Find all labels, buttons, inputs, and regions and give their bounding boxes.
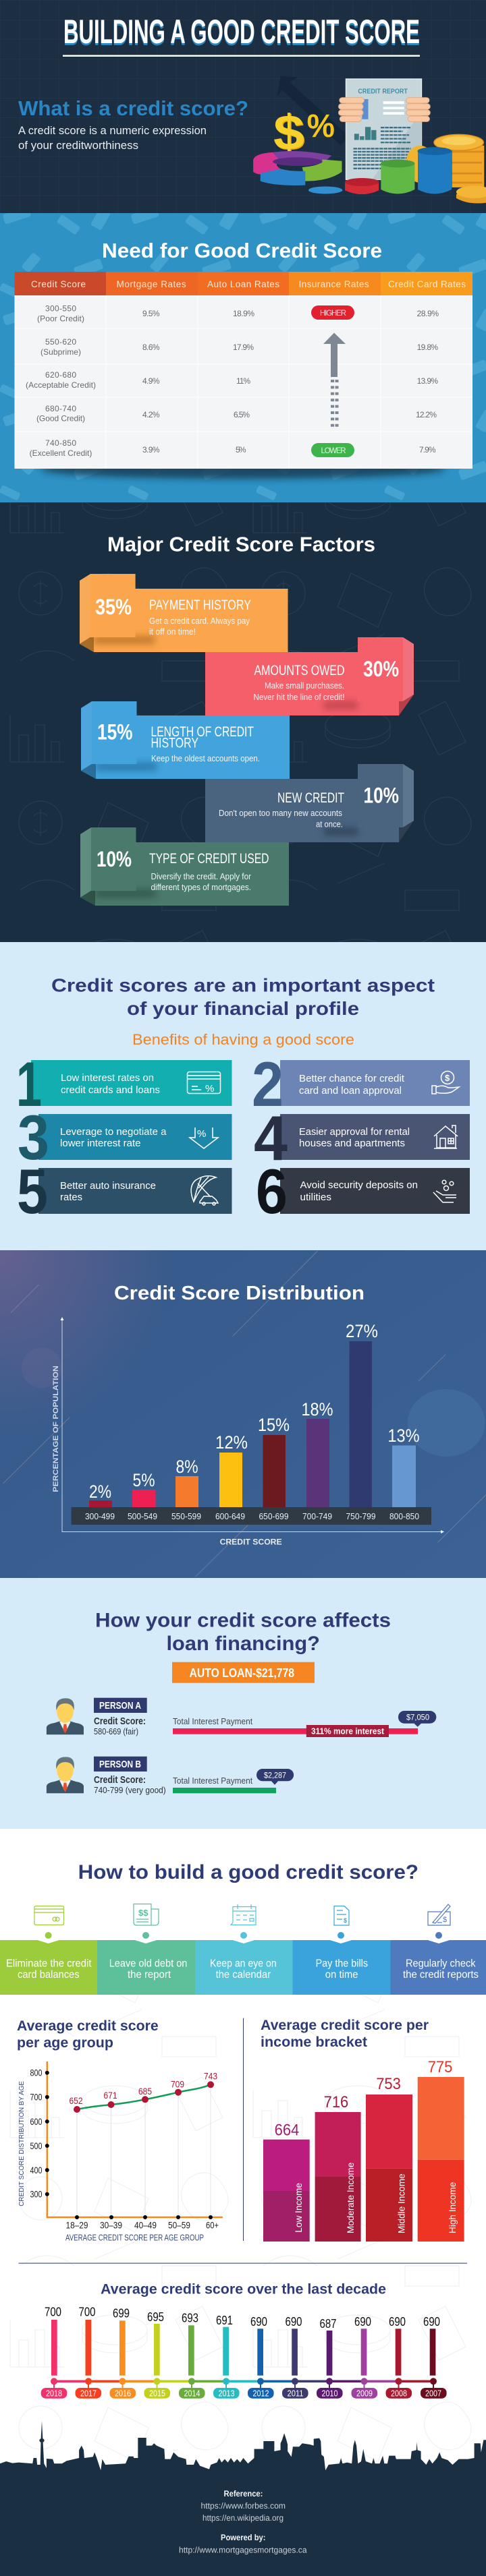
table header: Mortgage Rates [117, 279, 186, 289]
table rows: 550-620 [45, 337, 76, 347]
table header: Insurance Rates [299, 279, 369, 289]
footer: city skyline [0, 2421, 486, 2576]
card 4: rental approval: 4 [254, 1103, 288, 1173]
icon: cheque and pen [428, 1904, 450, 1925]
person B details: 740-799 (very good) [94, 1786, 166, 1795]
icon: calendar [231, 1904, 256, 1925]
text block: definition: of your creditworthiness [18, 140, 138, 152]
heading: Need for Good Credit Score [102, 239, 382, 262]
text block: definition [18, 125, 207, 152]
card 6: avoid deposits: Avoid security deposits on [300, 1180, 418, 1191]
credit report page: CREDIT REPORT [358, 88, 408, 96]
y axis label: PERCENTAGE OF POPULATION [52, 1366, 60, 1492]
badge: lower [311, 443, 354, 457]
heading: per income bracket: income bracket [261, 2035, 367, 2050]
table rows: (Excellent Credit) [30, 448, 92, 458]
timeline chart: last decade: 700 [78, 2306, 96, 2319]
step band: Keep an eye on [210, 1958, 277, 1970]
text block: definition: A credit score is a numeric expression [18, 125, 207, 137]
line chart: score by age: 400 [30, 2165, 43, 2175]
heading [95, 1610, 391, 1655]
ribbon: length of credit history [81, 701, 290, 779]
card 4: rental approval: houses and apartments [299, 1138, 405, 1149]
step band: Leave old debt on [109, 1958, 187, 1970]
heading: what is a credit score: What is a credit score? [18, 96, 248, 120]
y axis title: CREDIT SCORE DISTRIBUTION BY AGE [18, 2081, 26, 2206]
x axis label: CREDIT SCORE [220, 1538, 282, 1547]
references: https://www.forbes.com [201, 2501, 286, 2511]
table rows: (Acceptable Credit) [26, 380, 96, 390]
bar: person B interest [173, 1769, 294, 1793]
panel: credit score distribution [0, 1250, 486, 1578]
bar: person A interest: 311% more interest [311, 1727, 385, 1736]
line chart: score by age: 300 [30, 2189, 43, 2200]
ribbon: amounts owed: 30% [363, 657, 399, 681]
card 3: lower rate: lower interest rate [60, 1138, 140, 1149]
symbols: $ [274, 105, 305, 161]
person A details: PERSON A [99, 1700, 141, 1711]
icon: document [334, 1906, 349, 1925]
timeline chart: last decade: 687 [320, 2317, 336, 2331]
timeline chart: last decade: 690 [285, 2315, 302, 2329]
timeline chart: last decade: 690 [423, 2315, 440, 2329]
bar chart: score by income: High Income [448, 2182, 458, 2233]
card 6: avoid deposits [256, 1156, 470, 1227]
ribbon: type of credit used: TYPE OF CREDIT USED [149, 851, 269, 867]
auto loan banner [172, 1662, 315, 1683]
table rows: 8.6% [142, 343, 160, 352]
timeline chart: last decade: 2014 [184, 2388, 200, 2398]
card 1: low interest [16, 1049, 232, 1119]
timeline chart: last decade: 2016 [115, 2388, 131, 2398]
timeline chart: last decade: 2018 [46, 2388, 62, 2398]
bar: person B interest: $2,287 [264, 1771, 286, 1780]
references: http://www.mortgagesmortgages.ca [179, 2546, 307, 2555]
ribbon: type of credit used: Diversify the credit. Apply for [151, 872, 251, 881]
heading: of your financial profile [127, 998, 359, 1019]
badge: lower: LOWER [321, 447, 346, 455]
gold coin stacks [406, 134, 486, 204]
bar chart: distribution [52, 1317, 444, 1547]
timeline chart: last decade: 2008 [391, 2388, 407, 2398]
card 3: lower rate: Leverage to negotiate a [60, 1127, 167, 1138]
bar chart: distribution: 500-549 [128, 1511, 157, 1521]
table header: Auto Loan Rates [207, 279, 279, 289]
timeline chart: last decade: 2015 [149, 2388, 165, 2398]
person B details: Total Interest Payment [173, 1776, 252, 1786]
line chart: score by age [18, 2061, 223, 2243]
bar chart: distribution: 27% [346, 1321, 378, 1341]
step band: the report [128, 1969, 171, 1981]
ribbon: amounts owed: Never hit the line of credit! [254, 693, 344, 702]
card 5: auto insurance: rates [60, 1192, 82, 1203]
line chart: score by age: 671 [104, 2090, 117, 2101]
icon: house [434, 1125, 458, 1148]
line chart: score by age: 60+ [206, 2220, 219, 2231]
heading: per income bracket: Average credit score per [261, 2018, 429, 2033]
icon: card with percent [188, 1072, 220, 1094]
table rows: 18.9% [233, 309, 254, 318]
line chart: score by age: 40–49 [134, 2220, 157, 2231]
symbols: $ [273, 104, 304, 160]
badge: higher: HIGHER [320, 310, 346, 318]
line chart: score by age: 600 [30, 2116, 43, 2127]
person A details: Total Interest Payment [173, 1717, 252, 1726]
x axis title: AVERAGE CREDIT SCORE PER AGE GROUP [65, 2233, 204, 2243]
bar chart: score by income [263, 2058, 464, 2242]
ribbon: length of credit history: LENGTH OF CREDIT [151, 724, 254, 740]
bar chart: distribution: 600-649 [215, 1511, 245, 1521]
ribbon: payment history: 35% [95, 595, 132, 619]
step band: the credit reports [403, 1969, 479, 1981]
bar chart: distribution: 550-599 [171, 1511, 201, 1521]
bar chart: score by income: Middle Income [397, 2173, 407, 2233]
card 2: credit approval: 2 [252, 1049, 284, 1119]
ribbon: new credit [205, 764, 414, 842]
donut chart [253, 151, 342, 185]
timeline chart: last decade: 2017 [80, 2388, 97, 2398]
table rows: 4.2% [142, 410, 160, 419]
card 6: avoid deposits: 6 [256, 1156, 288, 1227]
table rows: (Subprime) [40, 347, 81, 357]
ribbon: type of credit used: different types of mortgages. [151, 883, 251, 892]
arrow: rates rise [323, 333, 346, 427]
ribbon: amounts owed: Make small purchases. [265, 681, 344, 691]
references: Powered by: [221, 2533, 266, 2542]
timeline chart: last decade: 699 [113, 2307, 130, 2320]
timeline chart: last decade: 2007 [425, 2388, 441, 2398]
bar: person A interest [173, 1711, 436, 1737]
bar chart: distribution: 5% [132, 1470, 155, 1490]
line chart: score by age: 800 [30, 2068, 43, 2078]
heading: loan financing? [166, 1633, 320, 1655]
icon: cheque and pen: $ [443, 1916, 447, 1924]
bar chart: score by income: 664 [275, 2121, 299, 2140]
bar chart: score by income: 753 [376, 2075, 401, 2093]
bar chart: distribution: 13% [387, 1426, 420, 1446]
card 4: rental approval [254, 1103, 470, 1173]
timeline chart: last decade: 693 [182, 2311, 198, 2324]
icon: hand with dollar coin: $ [445, 1073, 450, 1083]
timeline chart: last decade: 691 [216, 2314, 233, 2327]
icon: umbrella and car [191, 1176, 218, 1205]
auto loan banner: AUTO LOAN-$21,778 [189, 1666, 294, 1680]
card 3: lower rate: 3 [18, 1102, 49, 1173]
table rows: 620-680 [45, 370, 76, 380]
table rows: 19.8% [417, 343, 438, 352]
table header: Credit Score [31, 279, 86, 289]
bar chart: distribution: 18% [301, 1399, 333, 1419]
line chart: score by age: 652 [69, 2095, 83, 2106]
references: https://en.wikipedia.org [202, 2513, 284, 2523]
heading: How to build a good credit score? [78, 1861, 418, 1883]
hands [338, 98, 430, 121]
step icons [34, 1904, 450, 1925]
line chart: score by age: 30–39 [100, 2220, 122, 2231]
line chart: score by age: 743 [204, 2071, 217, 2082]
ribbon: payment history: PAYMENT HISTORY [149, 597, 251, 613]
bar chart: distribution: 8% [176, 1457, 198, 1477]
table rows: 6.5% [234, 410, 250, 419]
bar chart: distribution: 750-799 [346, 1511, 375, 1521]
table rows [26, 303, 439, 458]
icon: bill [134, 1904, 159, 1925]
ribbon: new credit: Don't open too many new accounts [219, 809, 342, 818]
panel: benefits of a good score [0, 942, 486, 1250]
step band [0, 1932, 486, 1995]
timeline chart: last decade: 690 [389, 2315, 406, 2329]
bar chart: distribution: 700-749 [302, 1511, 332, 1521]
line chart: score by age: 50–59 [168, 2220, 190, 2231]
ribbon: new credit: at once. [316, 820, 343, 829]
line chart: score by age: 18–29 [66, 2220, 88, 2231]
person B details [94, 1757, 252, 1795]
heading: per age group: Average credit score [17, 2018, 159, 2034]
person B details: PERSON B [99, 1759, 141, 1770]
symbols [273, 104, 335, 161]
card 2: credit approval: card and loan approval [299, 1086, 402, 1096]
table header: Credit Card Rates [388, 279, 466, 289]
card 2: credit approval: Better chance for credit [299, 1074, 404, 1084]
bar chart: score by income: Moderate Income [346, 2163, 356, 2233]
card 5: auto insurance: Better auto insurance [60, 1181, 156, 1192]
card 1: low interest: 1 [16, 1049, 42, 1119]
ribbon: new credit: 10% [363, 784, 399, 808]
panel: how to build a good credit score [0, 1829, 486, 2480]
person A details [94, 1698, 252, 1736]
bar chart: distribution: 15% [258, 1415, 290, 1435]
ribbon: new credit: NEW CREDIT [277, 790, 344, 806]
symbols: % [307, 109, 335, 144]
badge: higher [311, 305, 354, 320]
heading: How your credit score affects [95, 1610, 391, 1632]
ribbon: payment history: it off on time! [149, 627, 196, 637]
bar chart: score by income: Low Income [294, 2183, 304, 2233]
bar chart: score by income: 775 [428, 2058, 452, 2076]
panel: loan financing [0, 1578, 486, 1829]
table rows: 740-850 [45, 438, 76, 448]
timeline chart: last decade: 2010 [321, 2388, 338, 2398]
step band: Eliminate the credit [6, 1958, 92, 1970]
bar: person A interest: $7,050 [406, 1713, 429, 1722]
heading: per age group: per age group [17, 2035, 113, 2051]
person A details: 580-669 (fair) [94, 1727, 138, 1736]
table header [15, 272, 473, 295]
table rows: 9.5% [142, 309, 160, 318]
card 5: auto insurance [17, 1156, 232, 1227]
line chart: score by age: 685 [138, 2086, 152, 2097]
heading [51, 975, 435, 1019]
ribbon: type of credit used [80, 827, 289, 906]
panel: major credit score factors [0, 502, 486, 942]
table rows: 3.9% [142, 445, 160, 455]
icon: hand with dollar coin [432, 1071, 459, 1094]
line chart: score by age: 709 [171, 2079, 184, 2090]
timeline chart: last decade: 690 [354, 2315, 371, 2329]
ribbon: payment history: Get a credit card. Always pay [149, 616, 250, 626]
bar chart: distribution: 2% [89, 1482, 111, 1502]
card 6: avoid deposits: utilities [300, 1192, 331, 1203]
timeline chart: last decade: 2011 [288, 2388, 304, 2398]
icon: percent down arrow: % [197, 1128, 206, 1140]
table rows: 28.9% [417, 309, 439, 318]
ribbon: type of credit used: 10% [97, 847, 132, 871]
card 1: low interest: Low interest rates on [61, 1073, 154, 1084]
bar chart: distribution: 650-699 [259, 1511, 289, 1521]
icon: hand and coins [433, 1180, 456, 1202]
bar chart: distribution: 800-850 [389, 1511, 419, 1521]
table rows: 4.9% [142, 376, 160, 386]
timeline chart: last decade: 700 [45, 2306, 61, 2319]
cylinders [345, 147, 452, 194]
heading: per age group [17, 2018, 159, 2051]
icon: bill: $$ [138, 1908, 148, 1918]
table rows: 5% [236, 445, 246, 455]
step band: card balances [18, 1969, 80, 1981]
ribbon: length of credit history: Keep the oldest accounts open. [151, 754, 260, 763]
timeline chart: last decade: 2012 [252, 2388, 269, 2398]
icon: card with percent: % [205, 1083, 214, 1094]
timeline chart: last decade: 2013 [219, 2388, 235, 2398]
table rows: (Good Credit) [36, 414, 85, 423]
bar chart: distribution: 12% [215, 1432, 248, 1453]
icon: percent down arrow [190, 1128, 218, 1148]
person B details: Credit Score: [94, 1774, 146, 1786]
icon: person B [47, 1757, 84, 1793]
ribbon: length of credit history: 15% [97, 720, 132, 744]
step band: Regularly check [406, 1958, 476, 1970]
table rows: 13.9% [417, 376, 438, 386]
panel: header [0, 0, 486, 213]
ribbon: length of credit history: HISTORY [151, 736, 198, 751]
icon: credit card [34, 1906, 63, 1925]
heading: Credit Score Distribution [114, 1283, 364, 1304]
heading: per income bracket [261, 2018, 429, 2050]
ribbon: amounts owed [205, 637, 414, 715]
step band: on time [325, 1969, 358, 1981]
line chart: score by age: 700 [30, 2092, 43, 2103]
table rows: 12.2% [416, 410, 437, 419]
timeline chart: last decade: 690 [250, 2315, 267, 2329]
card 3: lower rate [18, 1102, 232, 1173]
ribbon: payment history [80, 574, 288, 652]
line chart: score by age: 500 [30, 2140, 43, 2151]
step band: Pay the bills [316, 1958, 368, 1970]
table rows: 300-550 [45, 303, 76, 313]
card 5: auto insurance: 5 [17, 1156, 48, 1227]
references: Reference: [224, 2489, 263, 2498]
heading: Credit scores are an important aspect [51, 975, 435, 996]
table rows: 7.9% [419, 445, 436, 455]
timeline chart: last decade: 695 [147, 2310, 164, 2324]
illustration: credit report with charts and coins [253, 76, 486, 204]
icon: person A [47, 1698, 84, 1734]
table rows: 680-740 [45, 404, 76, 413]
panel: need for good credit score [0, 213, 486, 502]
timeline chart: last decade [41, 2306, 447, 2399]
table rows: 11% [236, 376, 250, 386]
card 2: credit approval [252, 1049, 470, 1119]
axes [62, 1320, 441, 1532]
card 4: rental approval: Easier approval for rental [299, 1127, 410, 1138]
credit report page [346, 79, 422, 179]
table rows: (Poor Credit) [37, 314, 84, 324]
bar chart: score by income: 716 [324, 2093, 348, 2111]
step band: the calendar [216, 1969, 271, 1981]
timeline chart: last decade: 2009 [356, 2388, 373, 2398]
heading: Major Credit Score Factors [107, 533, 375, 556]
bar chart: distribution: 300-499 [85, 1511, 115, 1521]
icon: document: $ [344, 1917, 347, 1924]
card 1: low interest: credit cards and loans [61, 1085, 160, 1096]
heading: last decade: Average credit score over the last decade [101, 2282, 386, 2297]
table rows: 17.9% [233, 343, 254, 352]
references [179, 2489, 307, 2555]
ribbon: amounts owed: AMOUNTS OWED [254, 663, 344, 678]
person A details: Credit Score: [94, 1716, 146, 1727]
subheading: Benefits of having a good score [132, 1031, 354, 1048]
rates table [15, 272, 473, 469]
